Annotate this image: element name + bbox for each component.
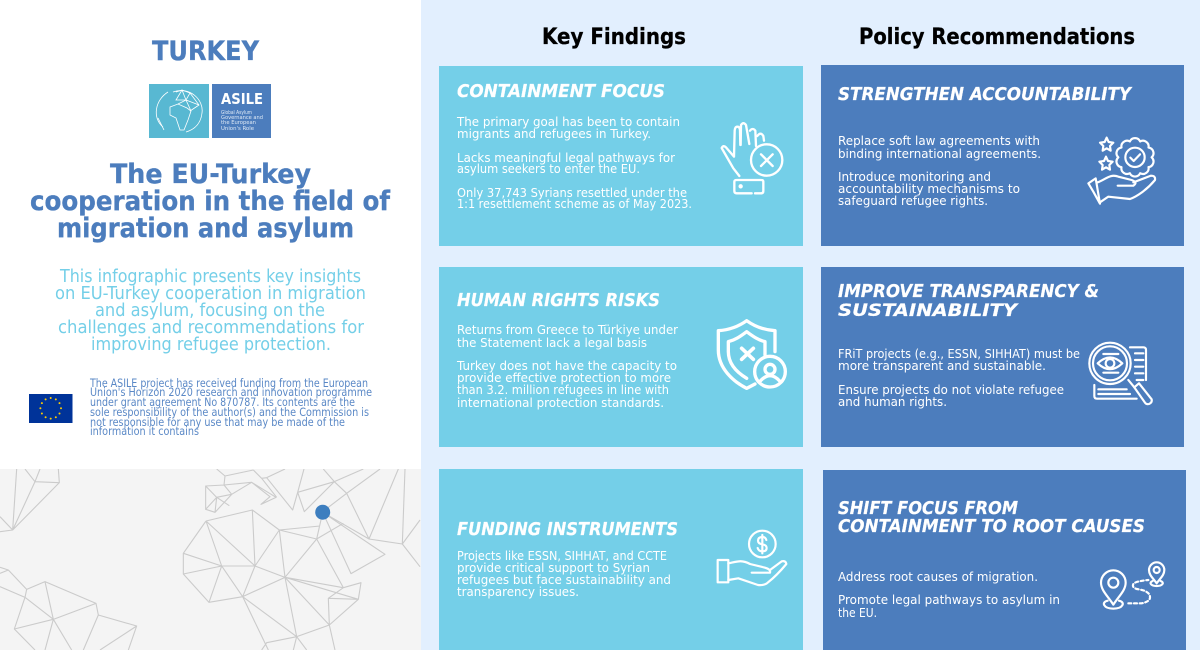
panel: strengthen accountability: STRENGTHEN ACCOUNTABILITY bbox=[838, 84, 1133, 105]
intro paragraph: improving refugee protection. bbox=[91, 335, 331, 355]
map panel with location marker bbox=[0, 469, 421, 650]
text: transparency recommendations: more transparent and sustainable. bbox=[838, 359, 1046, 374]
funding disclaimer: under grant agreement No 870787. Its contents are the bbox=[90, 395, 355, 409]
text: human rights findings: Turkey does not have the capacity to bbox=[456, 359, 677, 374]
text: transparency recommendations: Ensure projects do not violate refugee bbox=[838, 383, 1064, 398]
text: transparency recommendations: FRiT projects (e.g., ESSN, SIHHAT) must be bbox=[838, 347, 1080, 362]
text: transparency recommendations: and human rights. bbox=[838, 395, 947, 410]
text: root causes recommendations: Promote legal pathways to asylum in bbox=[838, 593, 1060, 608]
logo: ASILE: Union's Role bbox=[221, 126, 254, 132]
panel: shift focus to root causes bbox=[823, 470, 1186, 650]
text: accountability recommendations bbox=[838, 134, 1041, 209]
logo: ASILE: the European bbox=[221, 120, 256, 126]
page background bbox=[421, 0, 1200, 650]
text: root causes recommendations bbox=[838, 570, 1060, 621]
column heading: policy recommendations: Policy Recommendations bbox=[859, 25, 1135, 50]
icon: hand with dollar coin bbox=[718, 531, 786, 585]
panel: left intro bbox=[29, 36, 390, 438]
logo: ASILE: ASILE bbox=[221, 90, 263, 108]
heading: root causes bbox=[838, 498, 1145, 537]
heading: root causes: SHIFT FOCUS FROM bbox=[838, 498, 1018, 519]
text: accountability recommendations: binding international agreements. bbox=[838, 147, 1041, 162]
text: funding findings: transparency issues. bbox=[457, 585, 579, 600]
intro paragraph: This infographic presents key insights bbox=[59, 267, 361, 287]
intro paragraph bbox=[55, 267, 366, 355]
funding disclaimer: sole responsibility of the author(s) and the Commission is bbox=[90, 405, 369, 419]
text: human rights findings: Returns from Greece to Türkiye under bbox=[457, 323, 679, 338]
text: funding findings bbox=[457, 549, 671, 600]
panel: containment focus: CONTAINMENT FOCUS bbox=[457, 81, 665, 102]
logo: ASILE: Governance and bbox=[221, 115, 263, 121]
text: transparency recommendations bbox=[838, 347, 1080, 410]
text: human rights findings: the Statement lack a legal basis bbox=[457, 336, 647, 351]
text: accountability recommendations: accountability mechanisms to bbox=[838, 182, 1020, 197]
logo: ASILE bbox=[149, 84, 271, 138]
funding disclaimer bbox=[89, 376, 372, 438]
main title: cooperation in the field of bbox=[30, 186, 390, 217]
main title: The EU-Turkey bbox=[110, 159, 311, 190]
main title bbox=[30, 159, 390, 244]
heading: transparency bbox=[838, 281, 1099, 321]
heading: root causes: CONTAINMENT TO ROOT CAUSES bbox=[838, 516, 1145, 537]
text: funding findings: Projects like ESSN, SIHHAT, and CCTE bbox=[457, 549, 667, 564]
text: accountability recommendations: Replace soft law agreements with bbox=[838, 134, 1040, 149]
panel: strengthen accountability bbox=[821, 65, 1184, 246]
intro paragraph: and asylum, focusing on the bbox=[95, 301, 325, 321]
text: root causes recommendations: Address root causes of migration. bbox=[838, 570, 1038, 585]
heading: transparency: SUSTAINABILITY bbox=[838, 301, 1019, 321]
icon: raised hand with cross bbox=[722, 123, 782, 193]
panel: improve transparency and sustainability bbox=[821, 267, 1184, 447]
main title: migration and asylum bbox=[57, 213, 354, 244]
text: containment findings bbox=[456, 115, 692, 212]
column heading: key findings: Key Findings bbox=[542, 25, 686, 50]
icon: EU flag bbox=[29, 394, 72, 423]
icon: magnifier over document with eye bbox=[1089, 343, 1152, 404]
text: root causes recommendations: the EU. bbox=[838, 606, 877, 621]
logo: ASILE: Global Asylum bbox=[221, 110, 252, 116]
panel: human rights risks bbox=[439, 267, 803, 447]
panel: funding instruments: FUNDING INSTRUMENTS bbox=[457, 519, 678, 540]
funding disclaimer: The ASILE project has received funding from the European bbox=[89, 376, 368, 390]
panel: funding instruments bbox=[439, 469, 803, 650]
text: funding findings: refugees but face sustainability and bbox=[457, 573, 671, 588]
text: human rights findings bbox=[456, 323, 679, 411]
text: funding findings: provide critical support to Syrian bbox=[457, 561, 650, 576]
text: containment findings: The primary goal has been to contain bbox=[456, 115, 680, 130]
text: accountability recommendations: Introduce monitoring and bbox=[838, 170, 991, 185]
text: human rights findings: provide effective protection to more bbox=[457, 371, 671, 386]
intro paragraph: on EU-Turkey cooperation in migration bbox=[55, 284, 366, 304]
funding disclaimer: information it contains bbox=[90, 424, 199, 438]
text: accountability recommendations: safeguard refugee rights. bbox=[838, 194, 988, 209]
funding disclaimer: not responsible for any use that may be made of the bbox=[90, 415, 345, 429]
text: human rights findings: than 3.2. million refugees in line with bbox=[457, 383, 669, 398]
panel: containment focus bbox=[439, 66, 803, 246]
icon: hand with stars and gear bbox=[1088, 138, 1155, 204]
text: containment findings: migrants and refugees in Turkey. bbox=[457, 127, 651, 142]
panel: human rights risks: HUMAN RIGHTS RISKS bbox=[457, 290, 660, 311]
icon: shield with cross and person bbox=[718, 321, 785, 388]
country heading: TURKEY bbox=[152, 36, 259, 67]
heading: transparency: IMPROVE TRANSPARENCY & bbox=[838, 281, 1099, 302]
funding disclaimer: Union's Horizon 2020 research and innovation programme bbox=[90, 385, 372, 399]
text: containment findings: Only 37,743 Syrians resettled under the bbox=[457, 186, 687, 201]
text: containment findings: asylum seekers to enter the EU. bbox=[457, 162, 640, 177]
text: containment findings: 1:1 resettlement scheme as of May 2023. bbox=[457, 197, 692, 212]
icon: route between two map pins bbox=[1101, 562, 1164, 609]
text: human rights findings: international protection standards. bbox=[457, 396, 664, 411]
text: containment findings: Lacks meaningful legal pathways for bbox=[457, 151, 676, 166]
intro paragraph: challenges and recommendations for bbox=[58, 318, 365, 338]
